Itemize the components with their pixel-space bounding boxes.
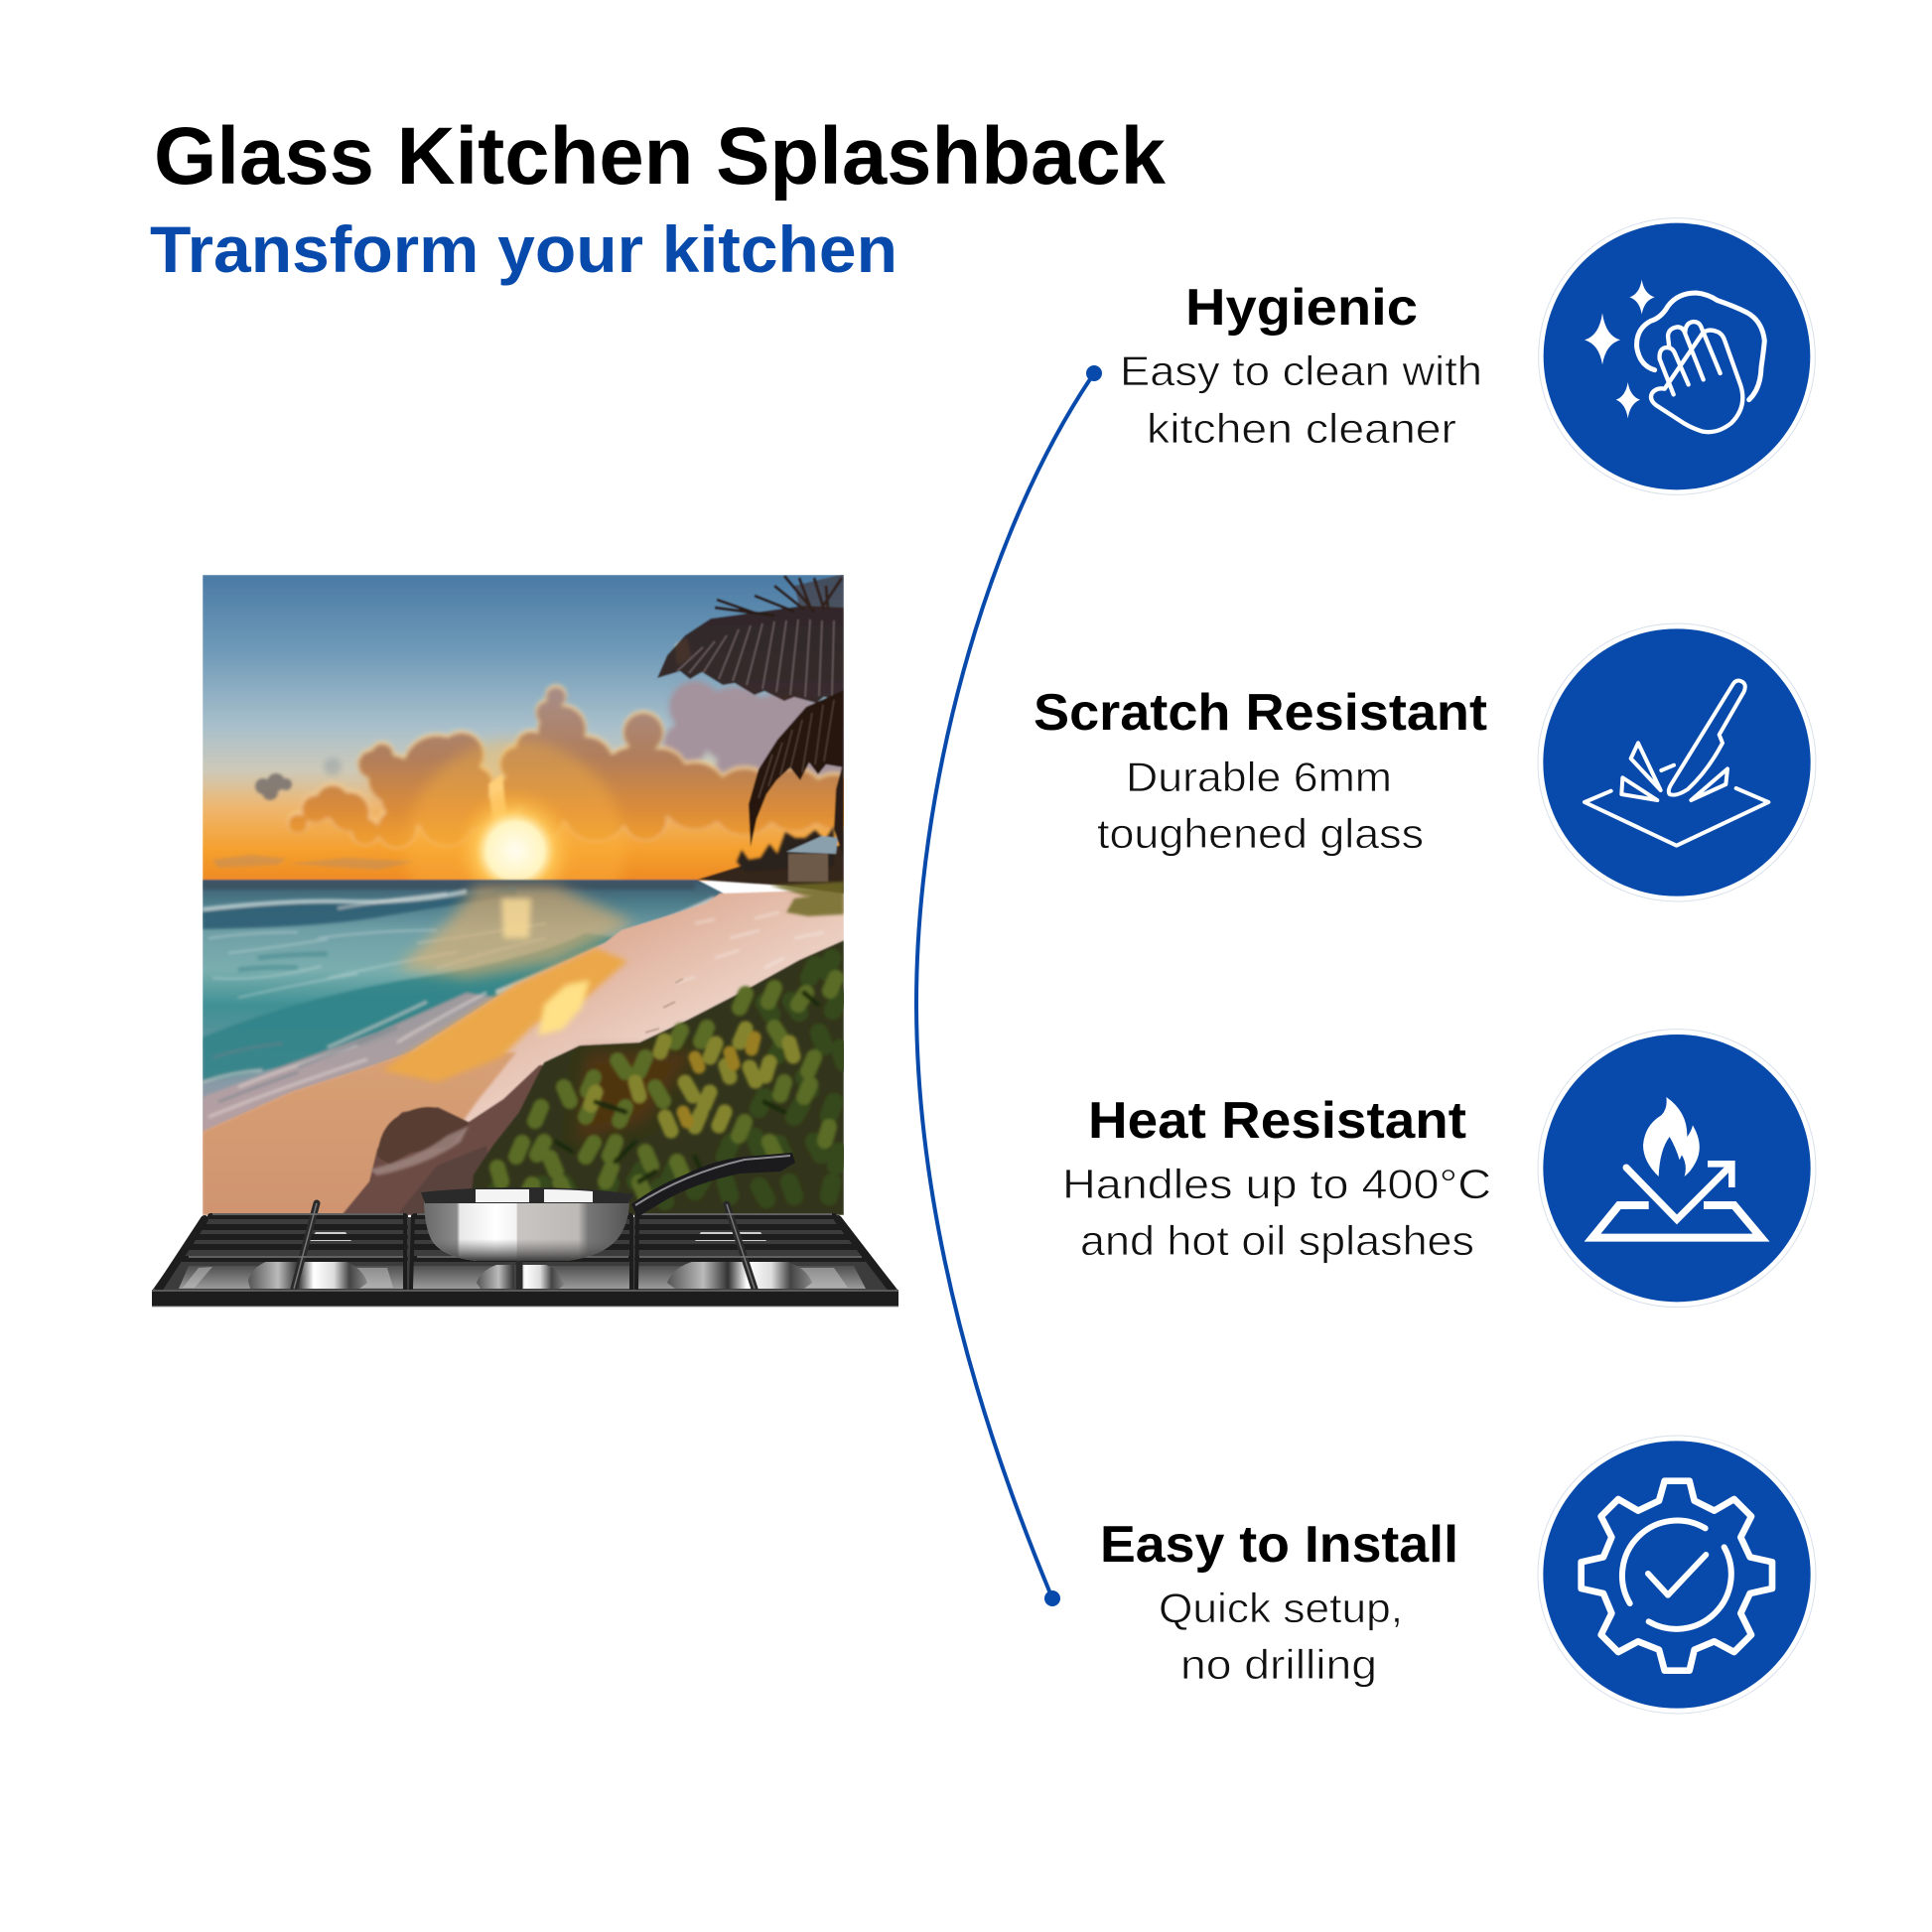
splashback beach photo <box>203 574 871 1215</box>
distant shore and house <box>697 826 844 916</box>
description: Handles up to 400°C <box>1062 1161 1491 1207</box>
description: toughened glass <box>1097 810 1424 857</box>
title: Glass Kitchen Splashback <box>154 111 1166 202</box>
description: Quick setup, <box>1159 1585 1403 1631</box>
description: and hot oil splashes <box>1080 1217 1474 1264</box>
description: Durable 6mm <box>1126 754 1392 800</box>
description <box>1097 754 1424 857</box>
feature: easy to install <box>1100 1516 1458 1688</box>
icon: flame on glass <box>1538 1030 1816 1308</box>
top dot <box>1086 365 1102 381</box>
pan body <box>424 1199 629 1261</box>
icon: hand wiping <box>1539 218 1815 494</box>
heading: Easy to Install <box>1100 1516 1458 1574</box>
feature: heat resistant <box>1062 1092 1491 1264</box>
vegetation <box>469 940 844 1215</box>
subtitle: Transform your kitchen <box>150 212 897 286</box>
sky <box>203 575 844 881</box>
heading: Hygienic <box>1185 279 1418 337</box>
rocks <box>342 1064 544 1213</box>
description <box>1159 1585 1403 1688</box>
grates <box>159 1203 892 1289</box>
description: Easy to clean with <box>1120 347 1482 394</box>
feature: scratch resistant <box>1034 684 1487 857</box>
pan rim <box>421 1187 633 1203</box>
description <box>1120 347 1482 452</box>
bottom dot <box>1044 1590 1060 1606</box>
palm fronds <box>657 574 844 859</box>
sunset clouds <box>212 637 871 870</box>
gas hob with pan <box>152 1153 898 1307</box>
feature: hygienic <box>1120 279 1482 452</box>
heading: Heat Resistant <box>1088 1092 1466 1150</box>
sun reflection <box>397 886 635 978</box>
icon: gear with check <box>1538 1436 1816 1714</box>
connector curve <box>916 365 1102 1606</box>
hob frame and plates <box>152 1217 898 1307</box>
description <box>1062 1161 1491 1264</box>
pan handle <box>631 1153 795 1217</box>
sea <box>203 880 724 1132</box>
sun <box>409 733 620 880</box>
burners <box>248 1232 812 1289</box>
sand <box>203 890 844 1215</box>
heading: Scratch Resistant <box>1034 684 1487 742</box>
wet golden sand <box>382 948 627 1082</box>
description: kitchen cleaner <box>1147 405 1456 452</box>
icon: knife on glass <box>1538 623 1816 901</box>
description: no drilling <box>1180 1641 1377 1688</box>
hob front strip <box>152 1292 898 1307</box>
